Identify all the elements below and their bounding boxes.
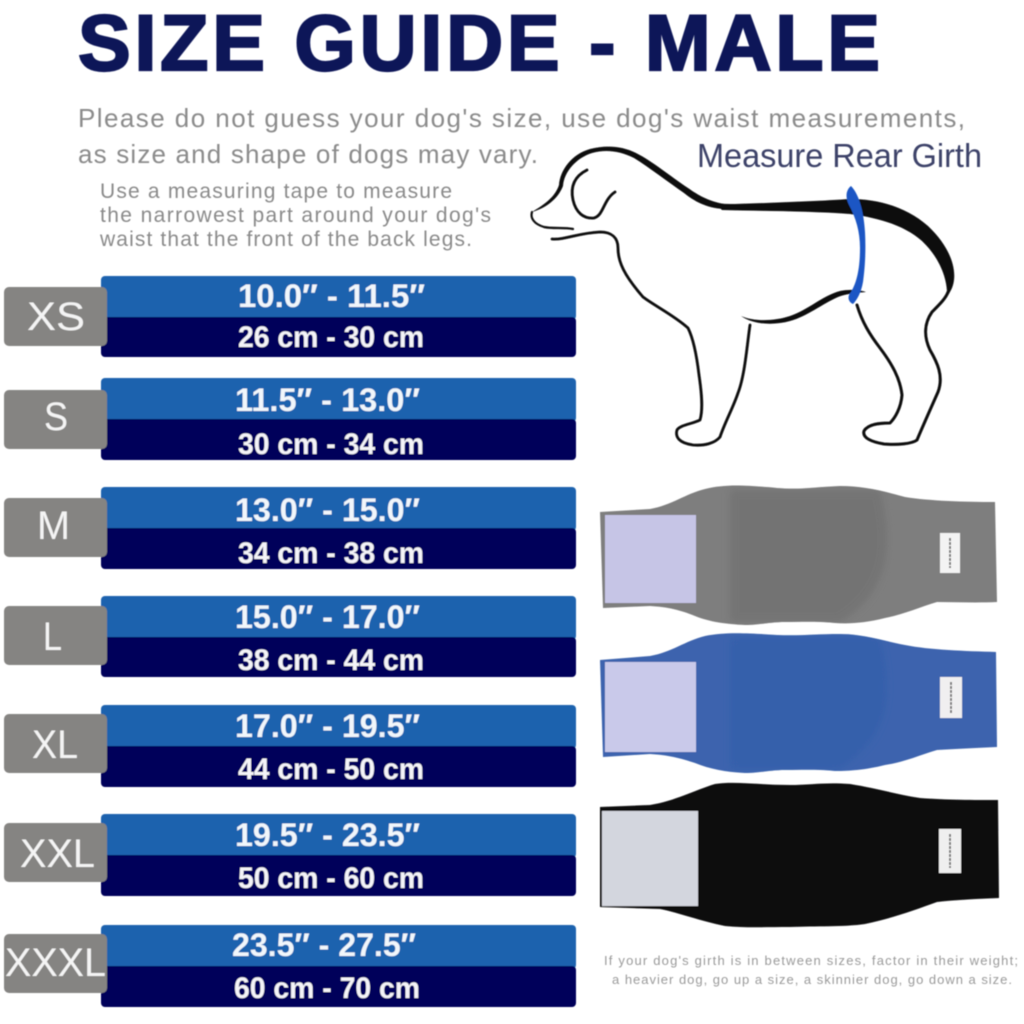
row S: 11.5″ - 13.0″ [235, 382, 420, 418]
girth measuring ring [847, 186, 865, 304]
intro text: as size and shape of dogs may vary. [78, 139, 538, 169]
row S: 30 cm - 34 cm [238, 428, 424, 461]
dog head and neck line [532, 147, 724, 212]
row XS: XS [27, 295, 85, 339]
dog chest and front leg [552, 232, 750, 445]
sizing footnote: If your dog's girth is in between sizes, factor in their weight; [604, 953, 1018, 968]
row XXXL: 60 cm - 70 cm [234, 972, 420, 1005]
sizing footnote: a heavier dog, go up a size, a skinnier dog, go down a size. [612, 972, 1012, 987]
grey band label [940, 533, 960, 573]
blue band pleats [772, 635, 880, 771]
title: SIZE GUIDE - MALE [78, 0, 880, 87]
dog muzzle [532, 212, 573, 229]
measuring instructions: Use a measuring tape to measure [100, 180, 452, 203]
row XXL [4, 814, 576, 896]
row M [4, 487, 576, 570]
black belly band [600, 783, 999, 927]
row XS: 26 cm - 30 cm [238, 321, 424, 354]
row L: 15.0″ - 17.0″ [235, 599, 420, 635]
measuring instructions: the narrowest part around your dog's [100, 204, 491, 227]
row XS: 10.0″ - 11.5″ [238, 278, 425, 314]
dog back [715, 199, 954, 297]
row XXXL: 23.5″ - 27.5″ [232, 927, 416, 963]
dog belly [741, 290, 866, 324]
dog ear [572, 170, 615, 218]
row M: 13.0″ - 15.0″ [235, 492, 420, 528]
row L: 38 cm - 44 cm [238, 644, 424, 677]
black band label [939, 829, 961, 873]
row XL [4, 705, 576, 787]
row XS [4, 276, 576, 357]
grey band velcro patch [605, 515, 696, 603]
blue band velcro patch [605, 662, 696, 752]
row M: M [37, 504, 70, 548]
grey band pleats [730, 490, 887, 622]
blue belly band [600, 633, 997, 773]
row XXL: 50 cm - 60 cm [238, 862, 424, 895]
row S: S [44, 395, 68, 439]
measure rear girth label: Measure Rear Girth [697, 137, 982, 174]
dog rear leg inner [857, 292, 948, 444]
row M: 34 cm - 38 cm [238, 537, 424, 570]
sizing footnote [604, 953, 1018, 987]
row XXL: XXL [20, 832, 95, 876]
row S [4, 378, 576, 461]
row XL: 17.0″ - 19.5″ [235, 708, 420, 744]
row L: L [43, 615, 62, 659]
measuring instructions [99, 180, 491, 251]
intro text: Please do not guess your dog's size, use dog's waist measurements, [78, 103, 965, 133]
size chart [4, 276, 576, 1007]
dog outline illustration [532, 147, 954, 445]
black band velcro patch [602, 811, 698, 906]
row XXL: 19.5″ - 23.5″ [235, 817, 420, 853]
row XL: XL [32, 723, 78, 767]
row XXXL [4, 925, 576, 1007]
row XL: 44 cm - 50 cm [238, 753, 424, 786]
intro text [78, 103, 965, 169]
grey belly band [600, 486, 997, 625]
blue band label [940, 677, 962, 718]
measuring instructions: waist that the front of the back legs. [99, 228, 472, 251]
row XXXL: XXXL [5, 941, 106, 985]
row L [4, 596, 576, 677]
